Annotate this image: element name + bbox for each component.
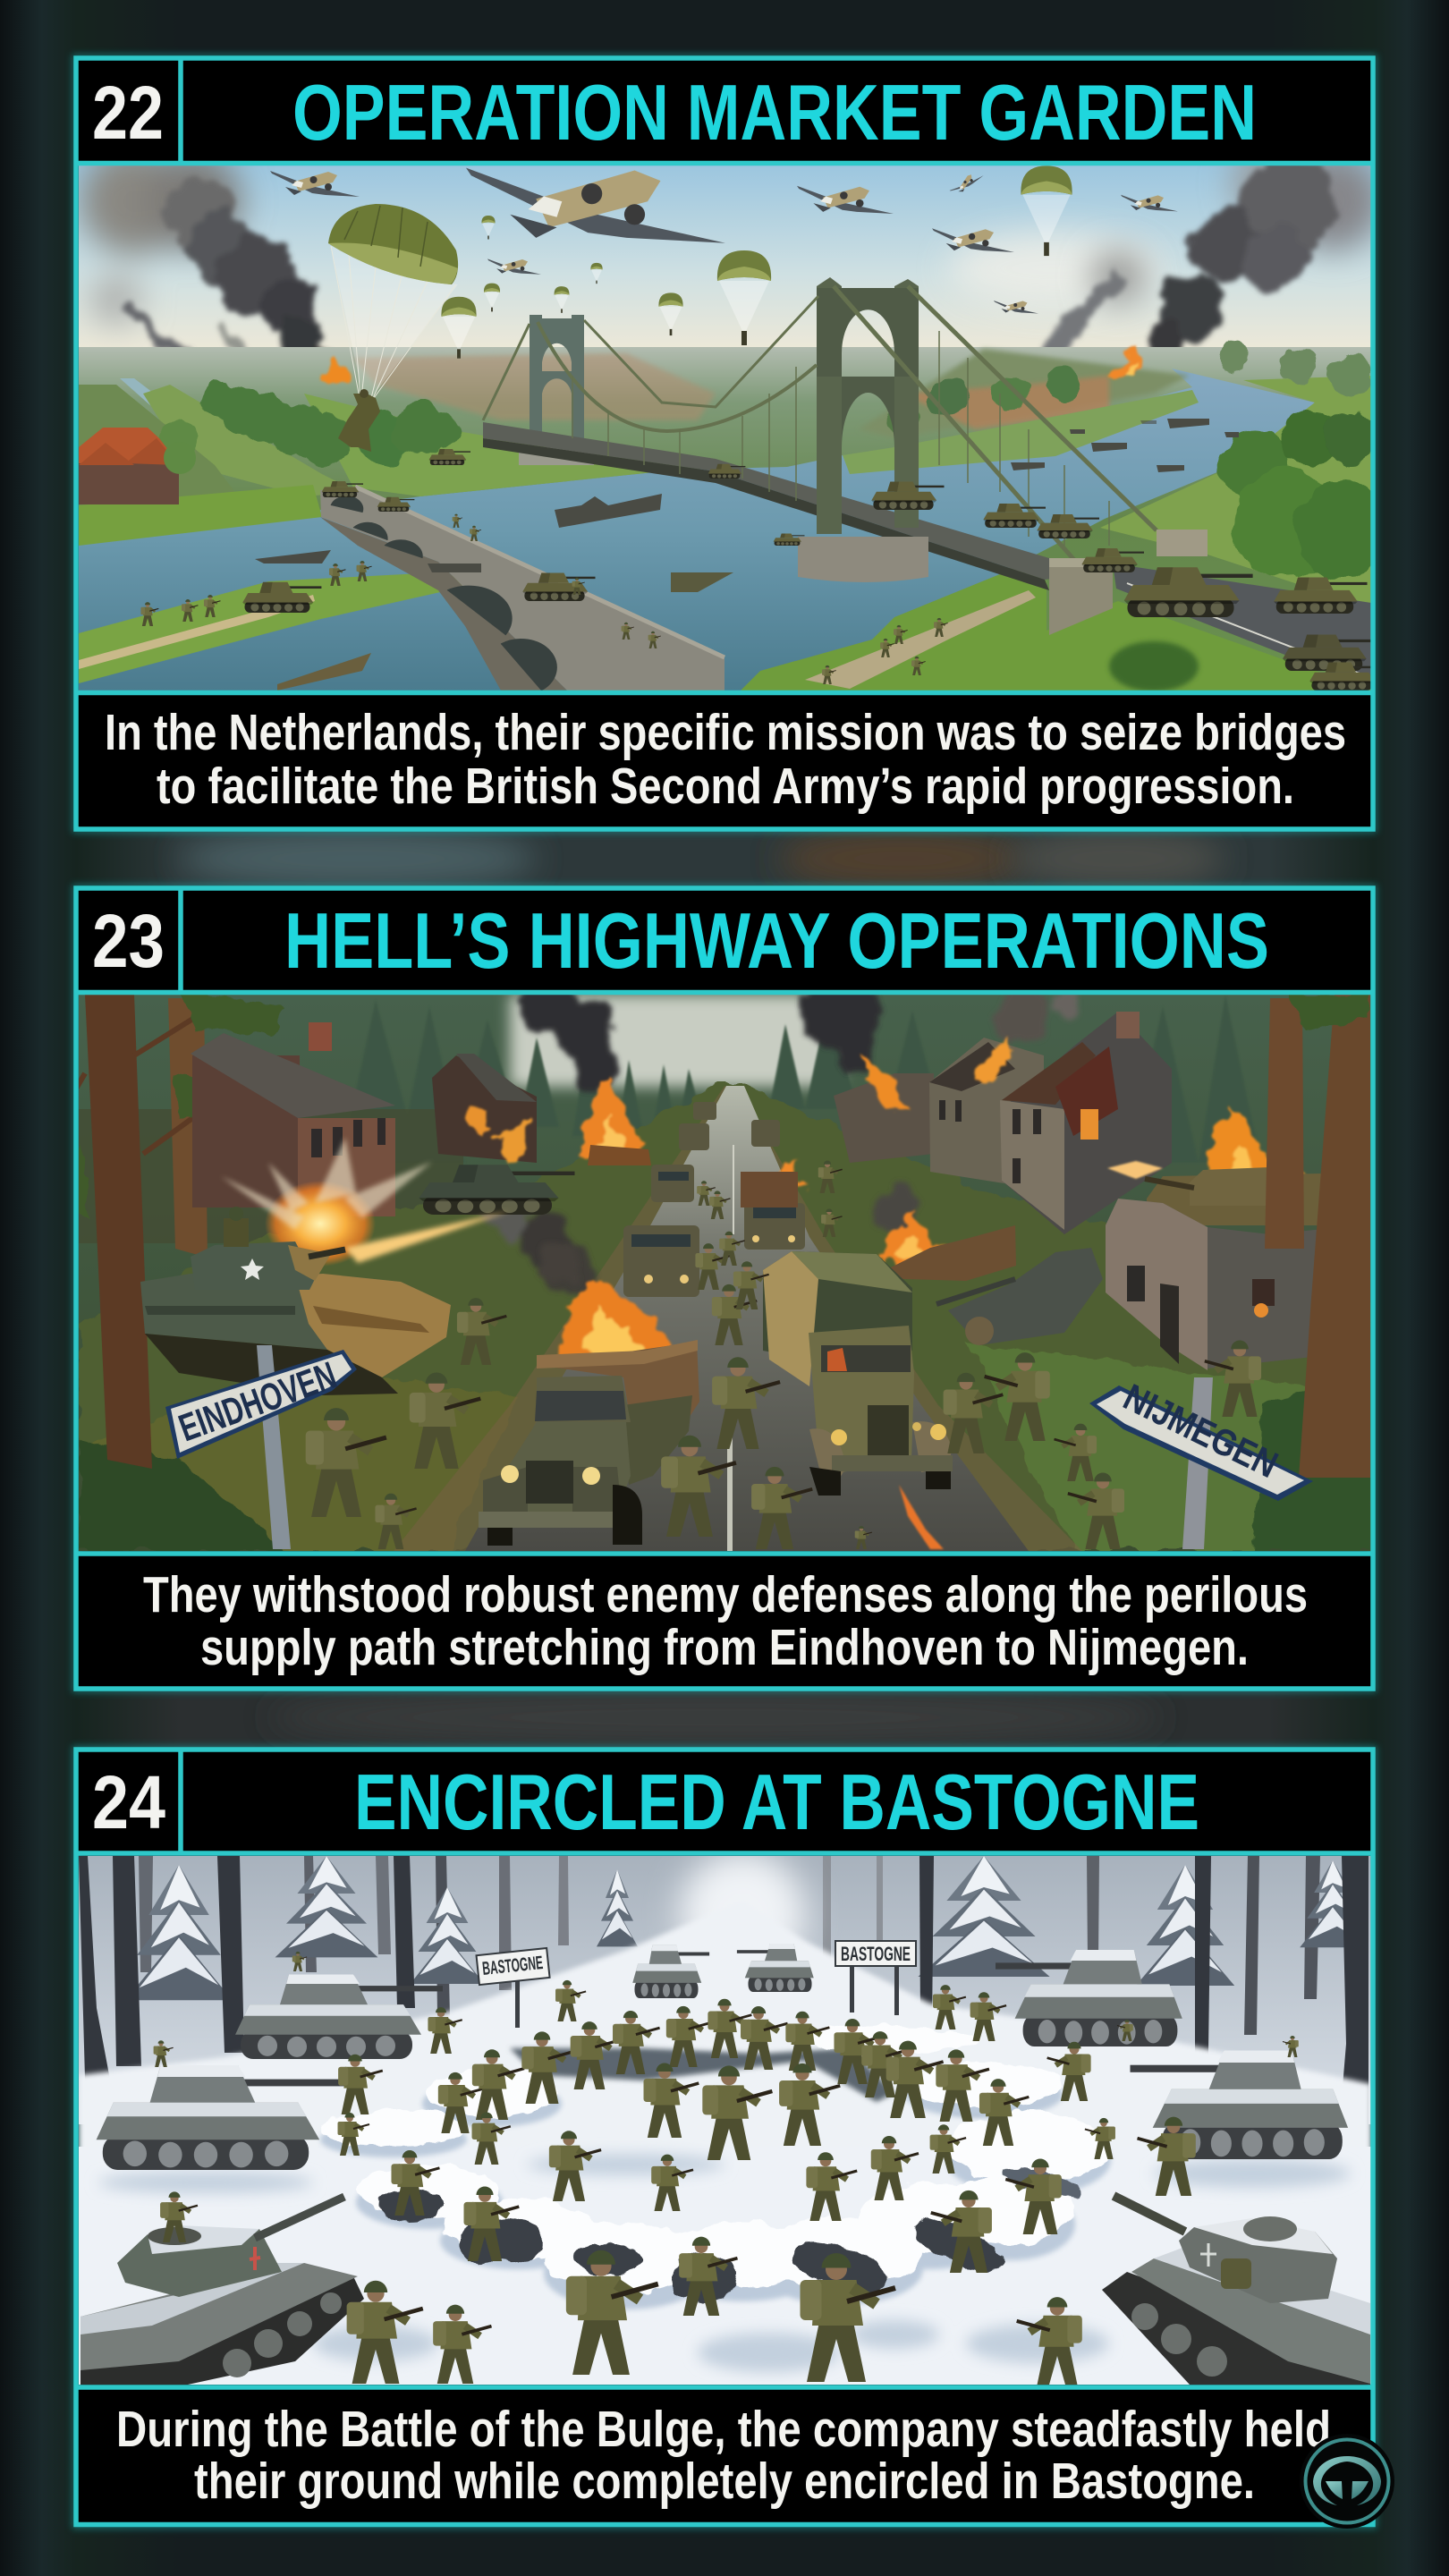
- suspension cables: [483, 286, 1157, 560]
- Bastogne sign left: BASTOGNE: [481, 1953, 544, 1979]
- suspension bridge road: [1113, 564, 1371, 689]
- foxholes: [377, 2162, 1085, 2302]
- road fire: [899, 1485, 944, 1549]
- right ruined houses: [834, 1012, 1172, 1234]
- frame lines: [76, 1750, 1373, 2524]
- tree trunks: [139, 1856, 1320, 2035]
- wrecks and background tanks: [419, 1145, 1103, 1345]
- mound shadows: [320, 2072, 1111, 2309]
- canvas-covered truck: [763, 1251, 953, 1496]
- header bar: [76, 888, 1373, 994]
- second burning house: [432, 1054, 537, 1165]
- red-roof house: [79, 428, 196, 504]
- caption background: [76, 2389, 1373, 2525]
- section number 24: 24: [92, 1760, 165, 1844]
- muzzle flash right: [1107, 1161, 1163, 1179]
- frame glow: [76, 58, 1373, 829]
- small parachutes: [441, 165, 1072, 359]
- abutments: [1049, 530, 1208, 635]
- caption background: [76, 693, 1373, 829]
- suspension bridge deck: [483, 422, 1109, 580]
- icon: circular emblem: [1300, 2434, 1394, 2529]
- snowy pines: [125, 1856, 1366, 2000]
- tanks and boats: [242, 419, 1383, 691]
- illustration: snowbound defensive ring: [79, 1852, 1371, 2385]
- ground: [79, 1087, 1371, 1551]
- suspension bridge tower two: [798, 277, 928, 582]
- road: [465, 1086, 1029, 1551]
- header bar: [76, 58, 1373, 164]
- panel: Operation Market Garden: [76, 58, 1390, 829]
- section number 23: 23: [92, 899, 165, 983]
- river and water: [79, 369, 1315, 691]
- caption line two: their ground while completely encircled in Bastogne.: [194, 2453, 1255, 2510]
- panel: Encircled at Bastogne: [76, 1750, 1373, 2525]
- snow shadows: [98, 2154, 1351, 2372]
- stone bridge: [320, 487, 724, 691]
- frame lines: [76, 888, 1373, 1689]
- tree lines: [161, 343, 1390, 577]
- concrete bunker and tank: [1106, 1167, 1369, 1370]
- left trees: [54, 988, 286, 1469]
- heading: Operation Market Garden: OPERATION MARKET GARDEN: [292, 68, 1257, 157]
- Eindhoven road sign: EINDHOVEN: [174, 1354, 342, 1450]
- snow-covered tanks: [97, 1944, 1348, 2170]
- snow mounds: [322, 2027, 1109, 2294]
- large foreground tank left: [80, 2197, 364, 2385]
- header bar: [76, 1750, 1373, 1853]
- defending soldiers: [154, 1952, 1299, 2385]
- Bastogne sign right: [835, 1941, 916, 2015]
- frame glow: [76, 888, 1373, 1689]
- aircraft formation: [270, 167, 1178, 313]
- Nijmegen road sign: NIJMEGEN: [1117, 1376, 1284, 1486]
- section number 22: 22: [92, 71, 164, 155]
- distant smoke: [80, 146, 1382, 325]
- Bastogne sign right: BASTOGNE: [841, 1943, 911, 1965]
- road trucks: [623, 1102, 805, 1297]
- Eindhoven road sign: [165, 1345, 357, 1549]
- fires: [324, 344, 1138, 383]
- panel: Hell's Highway Operations: [54, 888, 1373, 1689]
- burning truck: [479, 1241, 699, 1546]
- caption line two: supply path stretching from Eindhoven to Nijmegen.: [200, 1619, 1249, 1676]
- smoke plumes: [120, 165, 1342, 347]
- troops on the ground: [140, 514, 948, 684]
- frame glow: [76, 1750, 1373, 2525]
- foreground trunks: [79, 1856, 1368, 2214]
- main tank and explosion: [140, 1138, 510, 1395]
- illustration: paratroopers over bridges: [79, 146, 1390, 691]
- right trees: [1265, 995, 1370, 1478]
- back trench: [510, 2048, 1011, 2114]
- smoke columns: [486, 978, 1080, 1295]
- house and road fires: [580, 1038, 1315, 1266]
- illustration: supply road battle: [54, 978, 1371, 1551]
- caption background: [76, 1555, 1373, 1689]
- heading: Encircled at Bastogne: ENCIRCLED AT BASTOGNE: [354, 1758, 1199, 1846]
- left brick house: [191, 1022, 395, 1216]
- main parachutist: [328, 204, 458, 452]
- large foreground tank right: [1102, 2196, 1370, 2385]
- shell blast: [221, 1138, 510, 1267]
- Bastogne sign left: [477, 1948, 550, 2028]
- frame lines: [76, 58, 1373, 829]
- snow ground: [79, 1901, 1371, 2385]
- suspension bridge tower one: [519, 315, 594, 465]
- town and fields: [79, 349, 1371, 691]
- Nijmegen road sign: [1089, 1376, 1313, 1549]
- soldiers: [306, 1161, 1261, 1549]
- background pines: [340, 995, 1261, 1163]
